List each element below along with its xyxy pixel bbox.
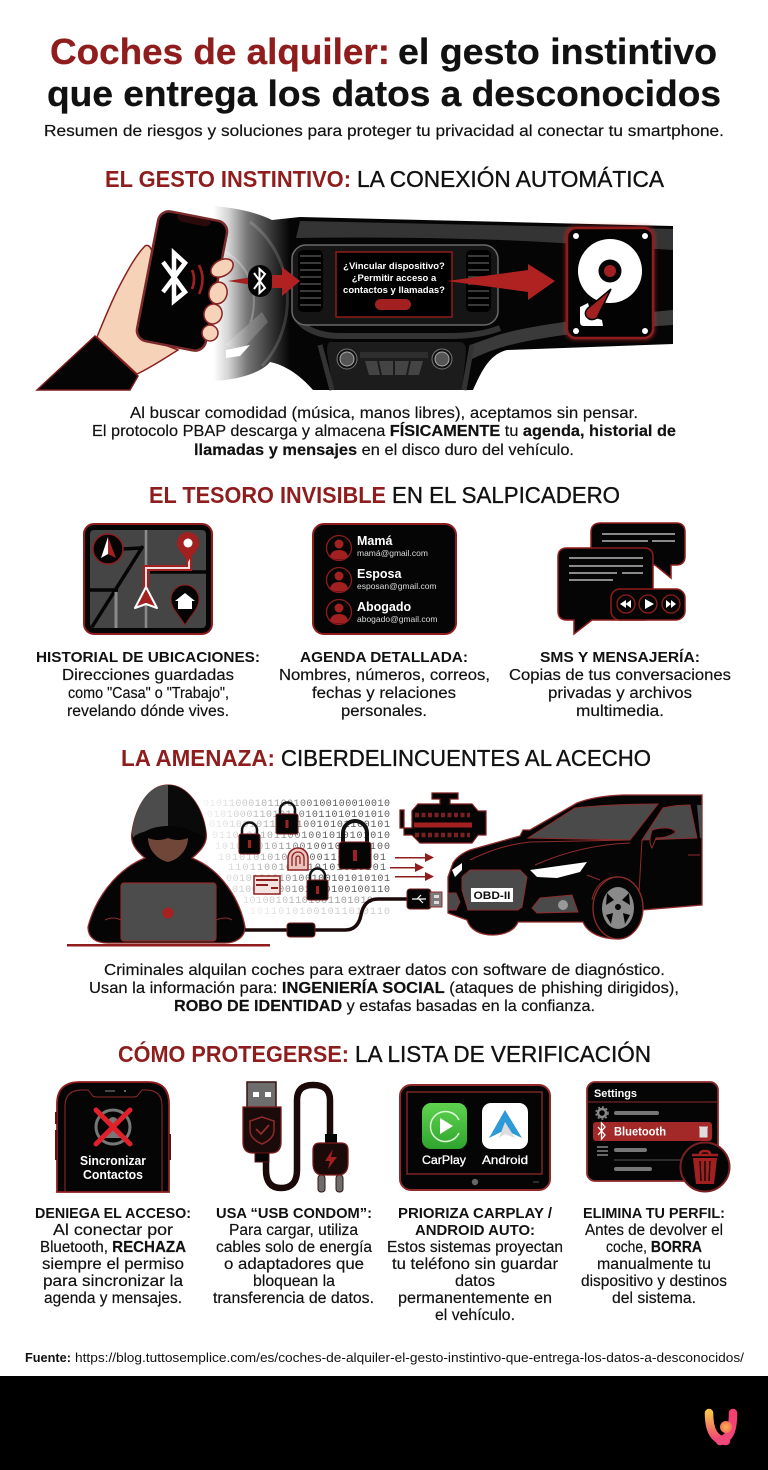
icon: phone denying contacts sync — [56, 1082, 170, 1192]
icon: map — [84, 524, 212, 634]
heading: la amenaza: CIBERDELINCUENTES AL ACECHO — [281, 745, 651, 771]
icon: contacts card: Esposa — [357, 567, 403, 581]
heading: el gesto instintivo — [105, 166, 665, 192]
column: sms y mensajería — [509, 649, 731, 720]
arrows: data flow — [390, 853, 434, 881]
car screen prompt: ¿Vincular dispositivo? — [343, 261, 445, 272]
icon: contacts card: abogado@gmail.com — [357, 614, 437, 624]
column: historial de ubicaciones: revelando dónde vives. — [67, 703, 229, 720]
column: elimina tu perfil: del sistema. — [612, 1290, 696, 1307]
column: elimina tu perfil — [581, 1205, 727, 1307]
column: historial de ubicaciones — [36, 649, 260, 720]
column: usb condom — [213, 1205, 374, 1307]
illustration: binary data stream: 1101100101010101010101 — [228, 863, 386, 874]
license plate — [471, 888, 513, 902]
heading: el gesto instintivo: LA CONEXIÓN AUTOMÁTICA — [357, 166, 665, 192]
car screen prompt: ¿Permitir acceso a — [352, 273, 437, 284]
heading: la amenaza — [121, 745, 651, 771]
text block: conexión — [92, 405, 676, 459]
source line: https://blog.tuttosemplice.com/es/coches-de-alquiler-el-gesto-instintivo-que-entrega-los-datos-a-desconocidos/ — [75, 1350, 744, 1365]
illustration: binary data stream: 101010101011000110100001 — [218, 853, 386, 864]
column: usb condom: bloquean la — [253, 1273, 335, 1290]
heading: cómo protegerse: LA LISTA DE VERIFICACIÓN — [355, 1041, 651, 1067]
car screen prompt — [336, 252, 452, 317]
icon: hard disk — [565, 226, 655, 340]
illustration: binary data stream: 010100101101010010101100101 — [209, 820, 390, 831]
icon: message bubbles — [558, 523, 685, 634]
heading: el tesoro invisible: EN EL SALPICADERO — [392, 482, 620, 508]
icon: contacts card: Abogado — [357, 600, 412, 614]
column: agenda detallada: Nombres, números, correos, — [279, 667, 490, 684]
icons: padlocks — [239, 803, 371, 900]
column: elimina tu perfil: coche, BORRA — [606, 1239, 702, 1256]
illustration: binary data stream: 10100101101001101010 — [243, 896, 373, 907]
illustration: binary data stream: 01101001011001001010101010 — [212, 831, 390, 842]
arrow: phone to car — [228, 265, 300, 297]
icon: settings delete profile: Bluetooth — [614, 1126, 666, 1138]
column: deniega el acceso: DENIEGA EL ACCESO: — [35, 1205, 191, 1222]
column: agenda detallada: AGENDA DETALLADA: — [300, 649, 468, 666]
icon: carplay and android auto screen: CarPlay — [422, 1153, 466, 1167]
illustration: car with obd-ii plate — [448, 795, 702, 939]
text block: conexión: El protocolo PBAP descarga y almacena FÍSICAMENTE tu agenda, historial de — [92, 421, 676, 440]
column: deniega el acceso: para sincronizar la — [43, 1273, 183, 1290]
text block: amenaza: ROBO DE IDENTIDAD y estafas basadas en la confianza. — [174, 998, 595, 1015]
icon: fingerprint — [288, 848, 308, 870]
title — [47, 31, 721, 114]
illustration: hooded hacker with laptop — [88, 785, 245, 943]
illustration: binary data stream: 10110101001011010110 — [250, 907, 390, 918]
column: sms y mensajería: multimedia. — [576, 703, 664, 720]
column: elimina tu perfil: ELIMINA TU PERFIL: — [583, 1205, 725, 1222]
license plate: OBD-II — [474, 890, 510, 902]
hand holding phone — [37, 210, 236, 390]
icon: settings delete profile: Settings — [594, 1088, 637, 1100]
icon: logo — [709, 1413, 733, 1441]
arrow: screen to hard disk — [447, 264, 555, 300]
illustration: binary data stream — [203, 799, 390, 918]
car screen prompt: contactos y llamadas? — [343, 285, 445, 296]
column: agenda detallada: personales. — [341, 703, 427, 720]
column: deniega el acceso: agenda y mensajes. — [44, 1290, 182, 1307]
text block: conexión: Al buscar comodidad (música, manos libres), aceptamos sin pensar. — [130, 405, 638, 422]
column: elimina tu perfil: manualmente tu — [597, 1256, 711, 1273]
column: usb condom: cables solo de energía — [216, 1239, 372, 1256]
column: historial de ubicaciones: Direcciones guardadas — [62, 667, 234, 684]
icon: contacts card — [313, 524, 456, 634]
icon: contacts card: esposan@gmail.com — [357, 581, 436, 591]
icon: usb condom cable — [243, 1082, 348, 1192]
column: carplay android auto: el vehículo. — [435, 1307, 515, 1324]
column: historial de ubicaciones: HISTORIAL DE UBICACIONES: — [36, 649, 260, 666]
icon: contacts card: Mamá — [357, 534, 392, 548]
icon: data card — [254, 876, 280, 894]
column: elimina tu perfil: Antes de devolver el — [585, 1222, 723, 1239]
footer band — [0, 1376, 768, 1470]
title: que entrega los datos a desconocidos — [47, 73, 721, 114]
column: carplay android auto: PRIORIZA CARPLAY / — [398, 1205, 553, 1222]
column: carplay android auto: datos — [455, 1273, 495, 1290]
column: deniega el acceso: siempre el permiso — [42, 1256, 184, 1273]
icon: carplay and android auto screen — [400, 1085, 550, 1190]
cable with usb connector — [245, 889, 442, 937]
icon: bluetooth on phone — [163, 253, 185, 301]
column: usb condom: Para cargar, utiliza — [229, 1222, 358, 1239]
column: deniega el acceso — [35, 1205, 191, 1307]
column: elimina tu perfil: dispositivo y destinos — [581, 1273, 727, 1290]
heading: el tesoro invisible: EL TESORO INVISIBLE — [149, 482, 386, 508]
column: carplay android auto — [387, 1205, 563, 1324]
heading: cómo protegerse — [118, 1040, 651, 1067]
lower console with knobs — [320, 342, 472, 390]
column: deniega el acceso: Al conectar por — [53, 1222, 173, 1239]
heading: el gesto instintivo: EL GESTO INSTINTIVO: — [105, 166, 351, 192]
column: carplay android auto: tu teléfono sin guardar — [392, 1256, 558, 1273]
air vents and console panel — [292, 245, 498, 325]
column: sms y mensajería: SMS Y MENSAJERÍA: — [540, 649, 700, 666]
icon: carplay and android auto screen: Android — [482, 1153, 528, 1167]
desk line — [67, 944, 270, 946]
column: usb condom: o adaptadores que — [224, 1256, 364, 1273]
text block: amenaza — [89, 962, 679, 1015]
column: agenda detallada — [279, 649, 490, 720]
text block: amenaza: Usan la información para: INGENIERÍA SOCIAL (ataques de phishing dirigidos), — [89, 978, 679, 997]
illustration: binary data stream: 0010101010100100101010101 — [226, 874, 390, 885]
column: sms y mensajería: privadas y archivos — [548, 685, 692, 702]
source line: Fuente: — [25, 1350, 71, 1365]
column: deniega el acceso: Bluetooth, RECHAZA — [40, 1239, 186, 1256]
column: carplay android auto: ANDROID AUTO: — [415, 1222, 535, 1239]
illustration: binary data stream: 010010100101010100100110 — [232, 885, 390, 896]
illustration: binary data stream: 0101000110101101011010101010 — [207, 810, 390, 821]
heading: la amenaza: LA AMENAZA: — [121, 745, 275, 771]
column: carplay android auto: Estos sistemas proyectan — [387, 1239, 563, 1256]
column: historial de ubicaciones: como "Casa" o "Trabajo", — [68, 685, 229, 702]
icon: obd connector — [400, 793, 486, 843]
column: carplay android auto: permanentemente en — [398, 1290, 552, 1307]
column: agenda detallada: fechas y relaciones — [312, 685, 456, 702]
heading: cómo protegerse: CÓMO PROTEGERSE: — [118, 1040, 349, 1067]
illustration: binary data stream: 1010100101100100101010100 — [215, 842, 390, 853]
illustration: binary data stream: 01011000101100100100100010010 — [203, 799, 390, 810]
title: el gesto instintivo — [398, 31, 717, 72]
subtitle: Resumen de riesgos y soluciones para proteger tu privacidad al conectar tu smartphone. — [44, 123, 724, 140]
column: sms y mensajería: Copias de tus conversaciones — [509, 667, 731, 684]
text block: amenaza: Criminales alquilan coches para extraer datos con software de diagnóstico. — [104, 962, 665, 979]
icon: phone denying contacts sync: Contactos — [83, 1168, 143, 1182]
icon: contacts card: mamá@gmail.com — [357, 548, 428, 558]
icon: settings delete profile — [587, 1082, 730, 1192]
icon: phone denying contacts sync: Sincronizar — [80, 1154, 146, 1168]
text block: conexión: llamadas y mensajes en el disco duro del vehículo. — [194, 442, 574, 459]
title: Coches de alquiler: — [50, 31, 390, 72]
column: usb condom: USA “USB CONDOM”: — [216, 1205, 372, 1222]
heading: el tesoro invisible — [149, 482, 620, 508]
column: usb condom: transferencia de datos. — [213, 1290, 374, 1307]
